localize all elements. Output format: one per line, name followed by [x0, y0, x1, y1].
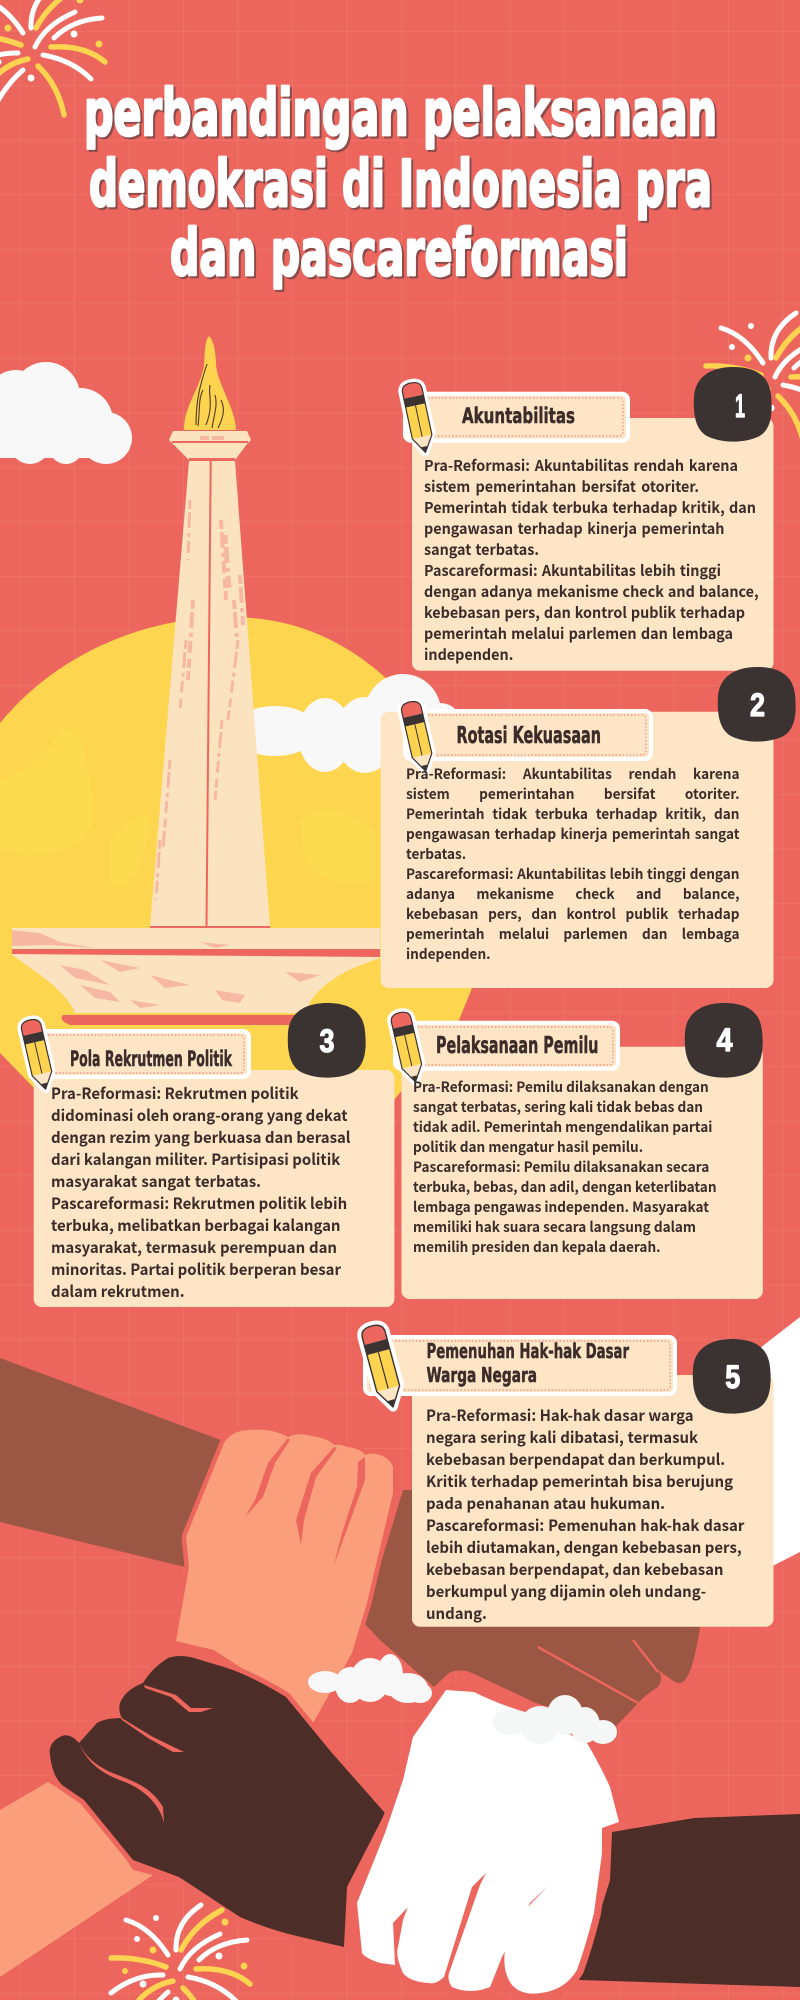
white arm behind card five: [755, 1317, 800, 1575]
brown forearm: [0, 1358, 226, 1567]
panel: Pemenuhan Hak-hak Dasar Warga Negara: 5: [725, 1359, 740, 1395]
panel: Rotasi Kekuasaan: [380, 667, 796, 988]
panel: Pelaksanaan Pemilu: tidak adil. Pemerintah mengendalikan partai: [413, 1117, 712, 1137]
panel: Rotasi Kekuasaan: adanya mekanisme check and balance,: [406, 884, 739, 904]
panel: Pemenuhan Hak-hak Dasar Warga Negara: pada penahanan atau hukuman.: [426, 1492, 664, 1514]
panel: Akuntabilitas: dengan adanya mekanisme check and balance,: [424, 580, 759, 602]
panel: Akuntabilitas: sangat terbatas.: [424, 538, 539, 560]
panel: Akuntabilitas: Akuntabilitas: [462, 404, 575, 428]
monument base: [12, 928, 380, 1013]
dark hand: [50, 1656, 385, 1947]
panel: Pelaksanaan Pemilu: Pascareformasi: Pemilu dilaksanakan secara: [413, 1157, 709, 1177]
panel: Rotasi Kekuasaan: Pascareformasi: Akuntabilitas lebih tinggi dengan: [406, 864, 739, 884]
panel: Pola Rekrutmen Politik: Pascareformasi: Rekrutmen politik lebih: [50, 1192, 347, 1214]
panel: Akuntabilitas: [398, 367, 774, 671]
monument shaft: [150, 461, 270, 927]
panel: Pemenuhan Hak-hak Dasar Warga Negara: kebebasan berpendapat dan berkumpul.: [426, 1448, 725, 1470]
monument: [12, 336, 380, 1025]
panel: Pelaksanaan Pemilu: memilih presiden dan kepala daerah.: [413, 1237, 660, 1257]
panel: Pemenuhan Hak-hak Dasar Warga Negara: kebebasan berpendapat, dan kebebasan: [426, 1558, 723, 1580]
panel: Pelaksanaan Pemilu: lembaga pengawas independen. Masyarakat: [413, 1197, 709, 1217]
small cloud right: [493, 1695, 617, 1744]
panel: Pelaksanaan Pemilu: 4: [716, 1022, 733, 1058]
panel: Pemenuhan Hak-hak Dasar Warga Negara: berkumpul yang dijamin oleh undang-: [426, 1580, 706, 1602]
panel: Akuntabilitas: Pra-Reformasi: Akuntabilitas rendah karena: [424, 454, 738, 476]
white hand: [357, 1690, 619, 1994]
panel: Pemenuhan Hak-hak Dasar Warga Negara: negara sering kali dibatasi, termasuk: [426, 1426, 697, 1448]
panel: Rotasi Kekuasaan: 2: [750, 687, 765, 723]
panel: Pemenuhan Hak-hak Dasar Warga Negara: Pra-Reformasi: Hak-hak dasar warga: [426, 1404, 693, 1426]
panel: Akuntabilitas: pengawasan terhadap kinerja pemerintah: [424, 518, 724, 538]
panel: Pola Rekrutmen Politik: terbuka, melibatkan berbagai kalangan: [50, 1214, 340, 1236]
panel: Pola Rekrutmen Politik: masyarakat, termasuk perempuan dan: [50, 1236, 336, 1258]
sun map pattern: [0, 729, 375, 886]
cloud: left: [0, 362, 132, 464]
panel: Pola Rekrutmen Politik: 3: [320, 1023, 334, 1059]
panel: Pelaksanaan Pemilu: Pelaksanaan Pemilu: [436, 1033, 598, 1059]
panel: Pola Rekrutmen Politik: masyarakat sangat terbatas.: [50, 1170, 260, 1192]
dark arm right: [579, 1814, 800, 1987]
panel: Pola Rekrutmen Politik: dari kalangan militer. Partisipasi politik: [50, 1148, 340, 1170]
panel: Pola Rekrutmen Politik: Pola Rekrutmen Politik: [70, 1047, 233, 1071]
flame: [184, 336, 236, 430]
panel: Pola Rekrutmen Politik: didominasi oleh orang-orang yang dekat: [50, 1104, 347, 1126]
panel: Akuntabilitas: independen.: [424, 644, 513, 664]
panel: Pelaksanaan Pemilu: Pra-Reformasi: Pemilu dilaksanakan dengan: [413, 1077, 709, 1097]
panel: Pola Rekrutmen Politik: Pra-Reformasi: Rekrutmen politik: [50, 1082, 298, 1104]
panel: Pemenuhan Hak-hak Dasar Warga Negara: Pascareformasi: Pemenuhan hak-hak dasar: [426, 1514, 744, 1536]
sun: [0, 617, 476, 1100]
panel: Pola Rekrutmen Politik: dengan rezim yang berkuasa dan berasal: [50, 1126, 350, 1148]
panel: Pola Rekrutmen Politik: dalam rekrutmen.: [50, 1280, 184, 1302]
panel: Pemenuhan Hak-hak Dasar Warga Negara: lebih diutamakan, dengan kebebasan pers,: [426, 1536, 741, 1558]
fireworks top left: [0, 0, 105, 117]
brown hand: [363, 1490, 700, 1727]
fireworks bottom: [111, 1905, 250, 2000]
panel: Pemenuhan Hak-hak Dasar Warga Negara: undang.: [426, 1602, 486, 1624]
panel: Akuntabilitas: Pascareformasi: Akuntabilitas lebih tinggi: [424, 560, 721, 580]
panel: Pemenuhan Hak-hak Dasar Warga Negara: Kritik terhadap pemerintah bisa berujung: [426, 1470, 732, 1492]
panel: Pola Rekrutmen Politik: [17, 1003, 394, 1307]
title: [84, 77, 717, 291]
panel: Akuntabilitas: sistem pemerintahan bersifat otoriter.: [424, 476, 699, 496]
panel: Akuntabilitas: 1: [735, 388, 745, 424]
panel: Rotasi Kekuasaan: Pra-Reformasi: Akuntabilitas rendah karena: [406, 764, 739, 784]
small cloud left: [308, 1654, 432, 1703]
panel: Akuntabilitas: Pemerintah tidak terbuka terhadap kritik, dan: [424, 496, 756, 518]
panel: Rotasi Kekuasaan: Rotasi Kekuasaan: [456, 723, 601, 749]
panel: Pelaksanaan Pemilu: memiliki hak suara secara langsung dalam: [413, 1217, 696, 1237]
panel: Rotasi Kekuasaan: pemerintah melalui parlemen dan lembaga: [406, 924, 739, 944]
panel: Rotasi Kekuasaan: pengawasan terhadap kinerja pemerintah sangat: [406, 824, 739, 844]
panel: Rotasi Kekuasaan: terbatas.: [406, 844, 466, 864]
panel: Pelaksanaan Pemilu: [387, 1003, 763, 1299]
cloud: behind card two: [232, 674, 462, 773]
panel: Akuntabilitas: kebebasan pers, dan kontrol publik terhadap: [424, 602, 745, 622]
peach hand: [176, 1430, 393, 1727]
panel: Rotasi Kekuasaan: kebebasan pers, dan kontrol publik terhadap: [406, 904, 739, 924]
panel: Pelaksanaan Pemilu: terbuka, bebas, dan adil, dengan keterlibatan: [413, 1177, 716, 1197]
peach forearm lower left: [0, 1782, 153, 1977]
monument top platform: [169, 431, 251, 460]
panel: Akuntabilitas: pemerintah melalui parlemen dan lembaga: [424, 622, 733, 644]
panel: Pelaksanaan Pemilu: sangat terbatas, sering kali tidak bebas dan: [413, 1097, 703, 1117]
panel: Pelaksanaan Pemilu: politik dan mengatur hasil pemilu.: [413, 1137, 643, 1157]
panel: Pemenuhan Hak-hak Dasar Warga Negara: Warga Negara: [426, 1363, 537, 1387]
fireworks top right: [706, 313, 800, 447]
panel: Rotasi Kekuasaan: independen.: [406, 944, 491, 964]
panel: Rotasi Kekuasaan: sistem pemerintahan bersifat otoriter.: [406, 784, 739, 804]
panel: Pemenuhan Hak-hak Dasar Warga Negara: [357, 1320, 774, 1627]
panel: Pemenuhan Hak-hak Dasar Warga Negara: Pemenuhan Hak-hak Dasar: [426, 1339, 629, 1363]
panel: Rotasi Kekuasaan: Pemerintah tidak terbuka terhadap kritik, dan: [406, 804, 739, 824]
panel: Pola Rekrutmen Politik: minoritas. Partai politik berperan besar: [50, 1258, 341, 1280]
